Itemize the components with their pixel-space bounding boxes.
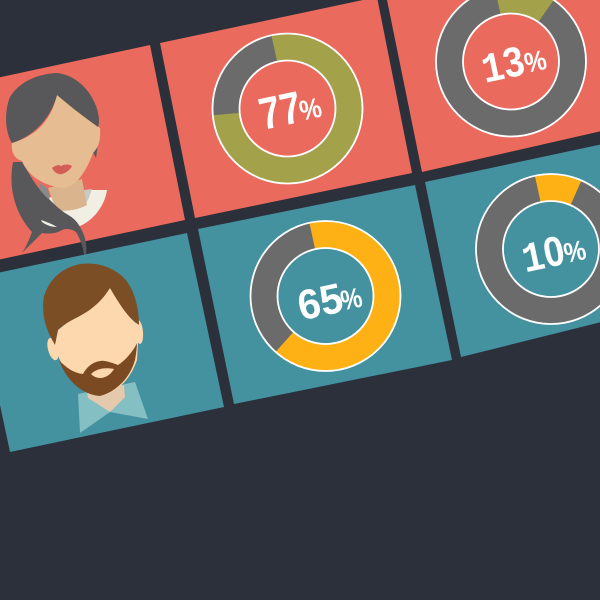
donut chart: 10 percent: [476, 174, 600, 324]
value label: 10%: [517, 223, 590, 285]
donut chart: 13 percent: [436, 0, 586, 136]
icon: woman face: [12, 95, 100, 188]
icon: man neck: [87, 385, 125, 412]
icon: woman ponytail: [11, 162, 86, 262]
value label: 10%: 10: [517, 227, 570, 285]
value label: 77%: 77: [254, 81, 306, 140]
panel: man chart tile 10 percent: [425, 134, 600, 357]
icon: woman lips: [52, 164, 72, 174]
panel: woman portrait tile: [0, 45, 185, 270]
icon: man face: [55, 288, 139, 396]
panel: man portrait tile: [0, 233, 224, 452]
icon: man shirt collar: [78, 382, 148, 433]
icon: woman hair highlight: [41, 220, 57, 227]
value label: 65%: 65: [293, 274, 347, 329]
icon: man left ear: [45, 337, 61, 361]
value label: 77%: %: [296, 91, 325, 127]
value label: 65%: [293, 270, 366, 329]
icon: woman hair: [6, 73, 99, 143]
panel: man chart tile 65 percent: [198, 185, 452, 404]
value label: 13%: 13: [477, 38, 529, 95]
donut chart: 77 percent: [212, 34, 362, 184]
icon: woman collar grey inner: [84, 189, 92, 204]
icon: woman hair back right: [92, 143, 98, 158]
value label: 65%: %: [338, 281, 365, 317]
icon: man beard: [59, 343, 137, 396]
value label: 13%: [477, 33, 551, 95]
panel: woman chart tile 13 percent: [386, 0, 600, 172]
panel: woman chart tile 77 percent: [160, 0, 412, 218]
icon: man mouth: [91, 368, 114, 378]
icon: woman collar shadow: [40, 183, 50, 203]
icon: man right ear: [134, 320, 144, 344]
value label: 10%: %: [561, 234, 589, 269]
value label: 13%: %: [521, 44, 549, 79]
icon: woman collar: [42, 190, 107, 226]
icon: man hair: [43, 264, 139, 345]
value label: 77%: [254, 77, 325, 140]
icon: woman neck: [48, 179, 87, 211]
donut chart: 65 percent: [250, 221, 400, 371]
